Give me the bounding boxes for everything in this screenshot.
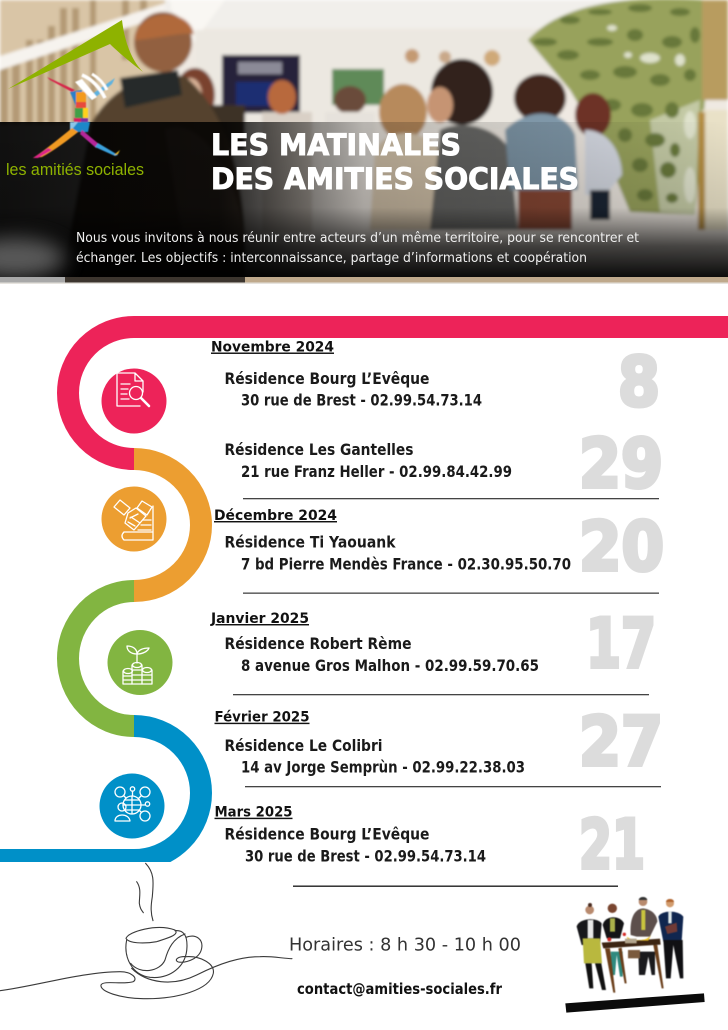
man in navy jacket [666, 899, 674, 907]
title: LES MATINALES [211, 128, 461, 162]
event: Décembre 2024: 7 bd Pierre Mendès France - 02.30.95.50.70 [241, 555, 571, 574]
intro text: Nous vous invitons à nous réunir entre acteurs d’un même territoire, pour se rencontrer et [76, 230, 639, 246]
schedule: Horaires : 8 h 30 - 10 h 00 [289, 936, 521, 956]
person with patterned sweater [379, 84, 427, 140]
event: Décembre 2024 [214, 508, 664, 587]
plant [528, 0, 705, 215]
event: Mars 2025: Résidence Bourg L’Evêque [224, 824, 430, 843]
red-haired woman in white [575, 93, 611, 137]
table with food [602, 939, 661, 948]
event: Février 2025: 14 av Jorge Semprùn - 02.99.22.38.03 [241, 758, 525, 777]
event: Décembre 2024: Résidence Ti Yaouank [224, 533, 396, 552]
icon: handshake with document [102, 486, 166, 552]
logo roof chevron [8, 20, 143, 89]
ribbon: blue segment [0, 726, 201, 862]
icon: coins with plant [108, 630, 172, 695]
event: Février 2025: Résidence Le Colibri [224, 736, 382, 755]
intro text: échanger. Les objectifs : interconnaissance, partage d’informations et coopération [76, 250, 587, 266]
event: Janvier 2025 [210, 605, 656, 684]
event: Février 2025: Février 2025 [214, 710, 310, 726]
event: Janvier 2025: Janvier 2025 [210, 611, 309, 627]
event: Janvier 2025: 8 avenue Gros Malhon - 02.99.59.70.65 [241, 656, 539, 675]
dark overlay band [0, 122, 646, 277]
event: Février 2025 [214, 703, 663, 782]
logo figure [33, 74, 120, 158]
event: Mars 2025: Mars 2025 [214, 805, 292, 821]
event: Novembre 2024: Résidence Les Gantelles [224, 440, 414, 459]
man in brown jacket, seen from behind [72, 74, 244, 260]
right column [702, 0, 728, 100]
event: Novembre 2024: 30 rue de Brest - 02.99.54.73.14 [241, 391, 482, 410]
title: DES AMITIES SOCIALES [211, 162, 579, 196]
icon: coffee cup line drawing [0, 863, 292, 999]
green picture [332, 69, 384, 105]
staircase [0, 0, 170, 125]
event: Mars 2025: 30 rue de Brest - 02.99.54.73.14 [245, 846, 486, 865]
icon: document with magnifier [102, 368, 166, 434]
man in grey jacket and yellow tie [639, 897, 647, 906]
ribbon: pink segment [68, 316, 728, 459]
poster [222, 55, 300, 113]
ribbon: orange segment [134, 459, 201, 591]
icon: global network of people [100, 774, 164, 838]
date number: 27 [579, 703, 663, 782]
date number: 17 [586, 605, 656, 684]
date number: 20 [579, 508, 664, 587]
woman in black cardigan and yellow skirt [585, 906, 594, 914]
contact email: contact@amities-sociales.fr [297, 980, 503, 998]
event: Novembre 2024: 21 rue Franz Heller - 02.99.84.42.99 [241, 462, 512, 481]
date number: 8 [618, 344, 660, 422]
background photo: group of people in a hall [0, 0, 728, 284]
timeline ribbon [0, 316, 728, 862]
people in the background [262, 112, 312, 232]
ribbon: green segment [68, 591, 134, 726]
denim jacket person [514, 74, 566, 122]
black caption bar [565, 993, 705, 1013]
month heading: Novembre 2024 [211, 340, 334, 356]
intro text [76, 230, 639, 266]
event: Novembre 2024: Résidence Bourg L’Evêque [224, 369, 430, 388]
event: Janvier 2025: Résidence Robert Rème [224, 634, 412, 653]
logo: les amitiés sociales [6, 20, 144, 179]
illustration: people around a table [565, 897, 705, 1013]
event: Mars 2025 [214, 805, 645, 885]
woman in black with teal trousers [608, 904, 617, 913]
title [211, 128, 579, 196]
logo wordmark: les amitiés sociales [6, 160, 144, 179]
date number: 29 [579, 425, 663, 504]
event: Décembre 2024: Décembre 2024 [214, 508, 337, 524]
event: Novembre 2024 [211, 340, 663, 504]
date number: 21 [579, 806, 645, 885]
